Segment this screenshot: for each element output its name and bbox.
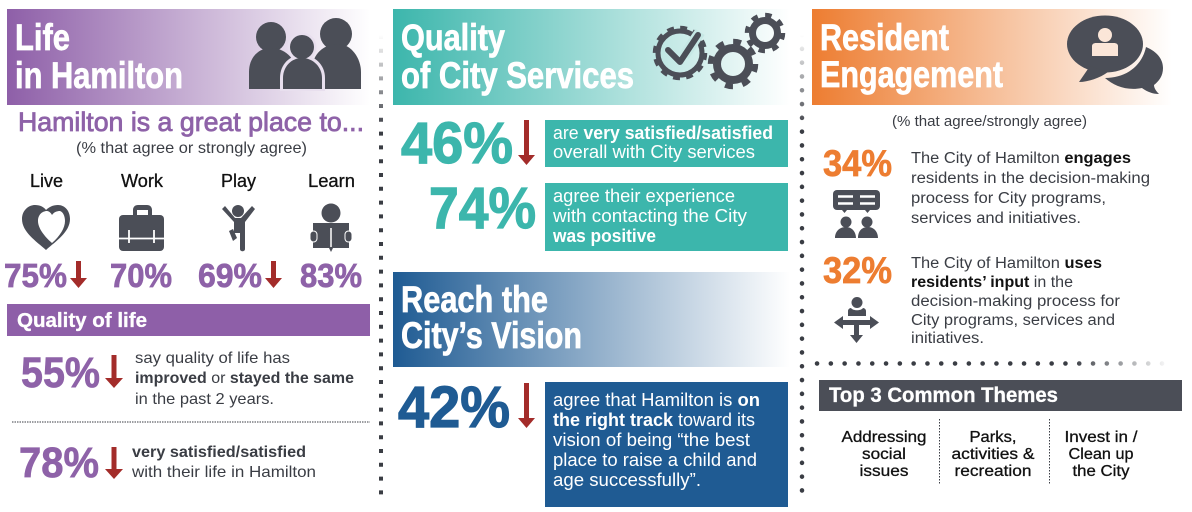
stat: 78% satisfied with life: very satisfied/satisfied (132, 444, 306, 461)
theme: parks, activities and recreation: Parks, (970, 429, 1016, 446)
stat: 42% on the right track: the right track toward its (553, 410, 755, 430)
theme: invest in / clean up the city (1064, 429, 1138, 480)
stat: 34% engages residents (823, 143, 1150, 238)
column: Live: Live (30, 171, 63, 191)
stat: 32% uses residents' input: 32% (823, 250, 892, 291)
panel: Resident Engagement (812, 9, 1172, 347)
note: agree/strongly agree: (% that agree/strongly agree) (892, 114, 1087, 130)
icon: reader with book (310, 204, 352, 252)
stat: 74% positive experience: agree their experience (553, 186, 735, 206)
stat: 55% quality of life: in the past 2 years. (135, 391, 274, 408)
stat: 42% on the right track (398, 375, 788, 507)
stat: 32% uses residents' input: decision-making process for (911, 293, 1120, 310)
stat: 42% on the right track: agree that Hamilton is on (553, 390, 760, 410)
column divider left (379, 35, 383, 496)
header: Life in Hamilton: Life (15, 17, 70, 58)
header: Life in Hamilton: in Hamilton (15, 55, 183, 96)
panel: Reach the City's Vision (393, 272, 790, 507)
stat: 32% uses residents' input (823, 250, 1120, 347)
theme: addressing social issues: Addressing (842, 429, 926, 446)
stat: 74% positive experience: with contacting the City (552, 206, 747, 226)
subheading: agree note: (% that agree or strongly agree) (76, 140, 307, 157)
column: Learn: 83% (300, 257, 362, 294)
stat: 55% quality of life: improved or stayed the same (135, 370, 354, 387)
panel: Quality of City Services (393, 9, 790, 251)
theme: parks, activities and recreation: recreation (954, 463, 1032, 480)
stat: 55% quality of life: 55% (21, 349, 100, 397)
column: Play: Play (221, 171, 256, 191)
theme: invest in / clean up the city: Clean up (1068, 446, 1134, 463)
stat: 32% uses residents' input: City programs, services and (911, 312, 1115, 329)
stat: 74% positive experience: was positive (552, 226, 656, 246)
stat: 34% engages residents: The City of Hamilton engages (911, 150, 1131, 167)
icon: briefcase (119, 205, 164, 251)
column: Learn: Learn (308, 171, 355, 191)
stat: 74% positive experience (429, 176, 788, 251)
stat: 46% satisfied overall: are very satisfied/satisfied (553, 123, 773, 143)
header: Quality of City Services (393, 9, 790, 105)
header: Quality of City Services: of City Services (401, 55, 634, 96)
theme: addressing social issues (842, 429, 926, 480)
icon: speech bubbles with person (1067, 16, 1163, 94)
stat: 32% uses residents' input: The City of Hamilton uses (911, 255, 1102, 272)
column: Learn (300, 171, 362, 294)
stat: 42% on the right track: age successfully”. (553, 470, 701, 490)
stat: 32% uses residents' input: initiatives. (911, 330, 984, 347)
stat: 46% satisfied overall (401, 111, 788, 176)
stat: 34% engages residents: process for City programs, (911, 190, 1106, 207)
column divider right (800, 35, 804, 494)
column: Work: Work (121, 171, 164, 191)
column: Live: 75% (4, 257, 67, 294)
theme: addressing social issues: issues (860, 463, 908, 480)
stat: 42% on the right track: 42% (398, 375, 510, 440)
header: Quality of City Services: Quality (401, 17, 505, 58)
column: Play: 69% (198, 257, 262, 294)
stat: 46% satisfied overall: 46% (401, 111, 513, 176)
panel: Life in Hamilton (4, 9, 370, 487)
column: Work (110, 171, 172, 294)
stat: 78% satisfied with life (19, 439, 316, 487)
icon: gears with check mark (654, 15, 783, 86)
stat: 78% satisfied with life: 78% (19, 439, 99, 487)
column: Work: 70% (110, 257, 172, 294)
header: Resident Engagement: Resident (820, 17, 949, 58)
subheader: Top 3 Common Themes: Top 3 Common Themes (829, 384, 1058, 407)
subheader: Quality of life: Quality of life (17, 310, 147, 332)
subheader: Quality of life (7, 304, 370, 336)
heading: Hamilton is a great place to: Hamilton is a great place to... (18, 107, 364, 137)
theme: parks, activities and recreation: activities & (952, 446, 1035, 463)
stat: 42% on the right track: place to raise a child and (553, 450, 757, 470)
column: Live (4, 171, 87, 294)
stat: 46% satisfied overall: overall with City services (553, 142, 755, 162)
panel: Top 3 Common Themes (819, 380, 1182, 484)
header: Reach the City's Vision (393, 272, 790, 367)
icon: jumping child (222, 205, 255, 251)
header: Resident Engagement (812, 9, 1172, 105)
icon: heart (22, 205, 70, 250)
icon: family of three people (249, 18, 361, 91)
header: Reach the City's Vision: City’s Vision (401, 315, 582, 356)
theme: parks, activities and recreation (952, 429, 1035, 480)
icon: person with direction arrows (834, 297, 879, 343)
stat: 34% engages residents: 34% (823, 143, 892, 184)
subheader: Top 3 Common Themes (819, 380, 1182, 411)
stat: 42% on the right track: vision of being “the best (553, 430, 750, 450)
theme: invest in / clean up the city: Invest in / (1064, 429, 1138, 446)
icon: two people with sign board (833, 190, 880, 238)
stat: 74% positive experience: 74% (429, 176, 536, 241)
stat: 78% satisfied with life: with their life in Hamilton (131, 464, 316, 481)
column: Play (198, 171, 282, 294)
stat: 55% quality of life (21, 349, 354, 408)
theme: invest in / clean up the city: the City (1072, 463, 1130, 480)
header: Reach the City's Vision: Reach the (401, 279, 548, 320)
header: Life in Hamilton (7, 9, 370, 105)
stat: 32% uses residents' input: residents’ input in the (911, 274, 1073, 291)
stat: 55% quality of life: say quality of life has (135, 350, 290, 367)
theme: addressing social issues: social (862, 446, 906, 463)
stat: 34% engages residents: services and initiatives. (911, 210, 1081, 227)
stat: 34% engages residents: residents in the decision-making (911, 170, 1150, 187)
header: Resident Engagement: Engagement (820, 54, 1003, 95)
